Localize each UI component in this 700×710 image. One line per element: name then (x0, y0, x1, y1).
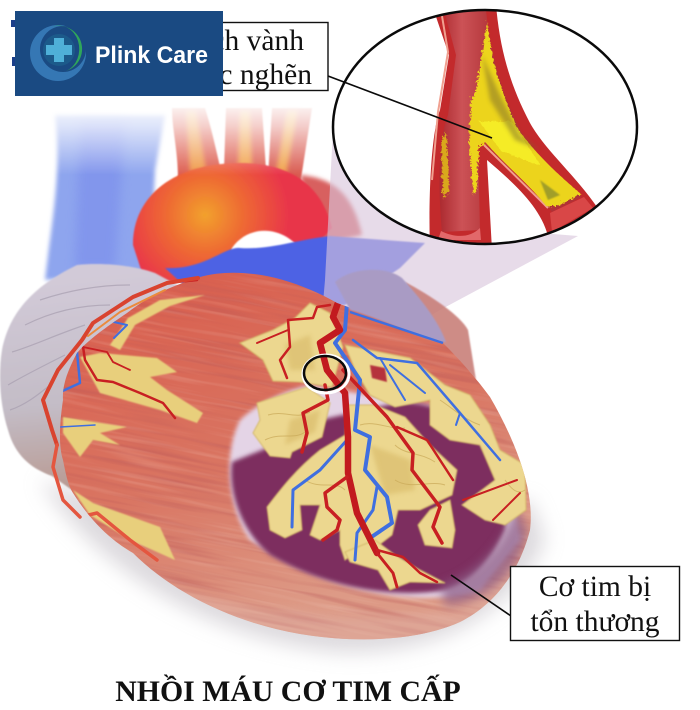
label: blocked coronary artery (102, 22, 328, 91)
arch branch vessels (172, 108, 312, 185)
fat: central cluster (267, 405, 457, 560)
drop shadow under heart (40, 480, 545, 652)
fat lobe shading (285, 335, 415, 495)
red patch (370, 365, 387, 382)
great vessels (40, 100, 425, 305)
pulmonary trunk (165, 236, 425, 305)
fat: lower right lobe (418, 500, 455, 548)
fat: upper left patch (240, 303, 343, 387)
atrium wrinkles (8, 285, 130, 410)
ventricle muscle (60, 272, 531, 640)
label: damaged heart muscle: tổn thương (530, 606, 660, 638)
fat: lower tongue (345, 540, 445, 590)
infarct glow (229, 385, 520, 598)
lens outline (333, 10, 637, 244)
fading top of vessels (40, 100, 330, 175)
right auricle (335, 270, 446, 342)
right ventricle band (405, 282, 476, 380)
infarct zone (231, 402, 506, 593)
label: damaged heart muscle (510, 566, 680, 640)
lumen cut ends (438, 228, 481, 240)
hidden heading remnants (11, 20, 15, 66)
arteries (43, 280, 520, 587)
magnifier cone (318, 130, 578, 368)
label: damaged heart muscle: Cơ tim bị (539, 571, 651, 603)
left atrium (0, 264, 205, 490)
fat lobe creases (265, 400, 525, 492)
fat: left cluster (253, 387, 330, 458)
fat: right arm (345, 345, 526, 525)
detail: small blockage circle (303, 355, 349, 393)
logo wordmark: Plink Care (95, 42, 208, 69)
leader line: damaged muscle (451, 575, 511, 616)
auricle edge vein (350, 312, 443, 343)
artery cross-section (429, 5, 597, 250)
artery lumen (440, 10, 582, 232)
descending aorta behind cone (300, 175, 362, 245)
icon: logo emblem (30, 25, 86, 81)
lens background (333, 10, 637, 244)
artery wall (429, 5, 597, 250)
lower pale edge (170, 574, 510, 639)
veins (53, 303, 500, 560)
leader line: blocked artery (328, 76, 492, 138)
vena cava, blue (45, 115, 165, 280)
title: NHỒI MÁU CƠ TIM CẤP (115, 674, 461, 708)
fat deposits (240, 303, 526, 590)
inner wall highlights (432, 10, 448, 180)
label: blocked coronary artery: Động mạch vành (102, 25, 304, 57)
muscle fibres (60, 278, 530, 634)
logo: Plink Care (15, 11, 223, 96)
left coronary vessels on atrium edge (43, 278, 198, 517)
illustration: heart (0, 100, 593, 686)
aortic arch (133, 163, 332, 282)
callout: magnified blocked artery (333, 5, 637, 250)
left fat patches (63, 295, 205, 560)
label: blocked coronary artery: bị tắc nghẽn (168, 59, 312, 91)
plaque (440, 20, 580, 205)
